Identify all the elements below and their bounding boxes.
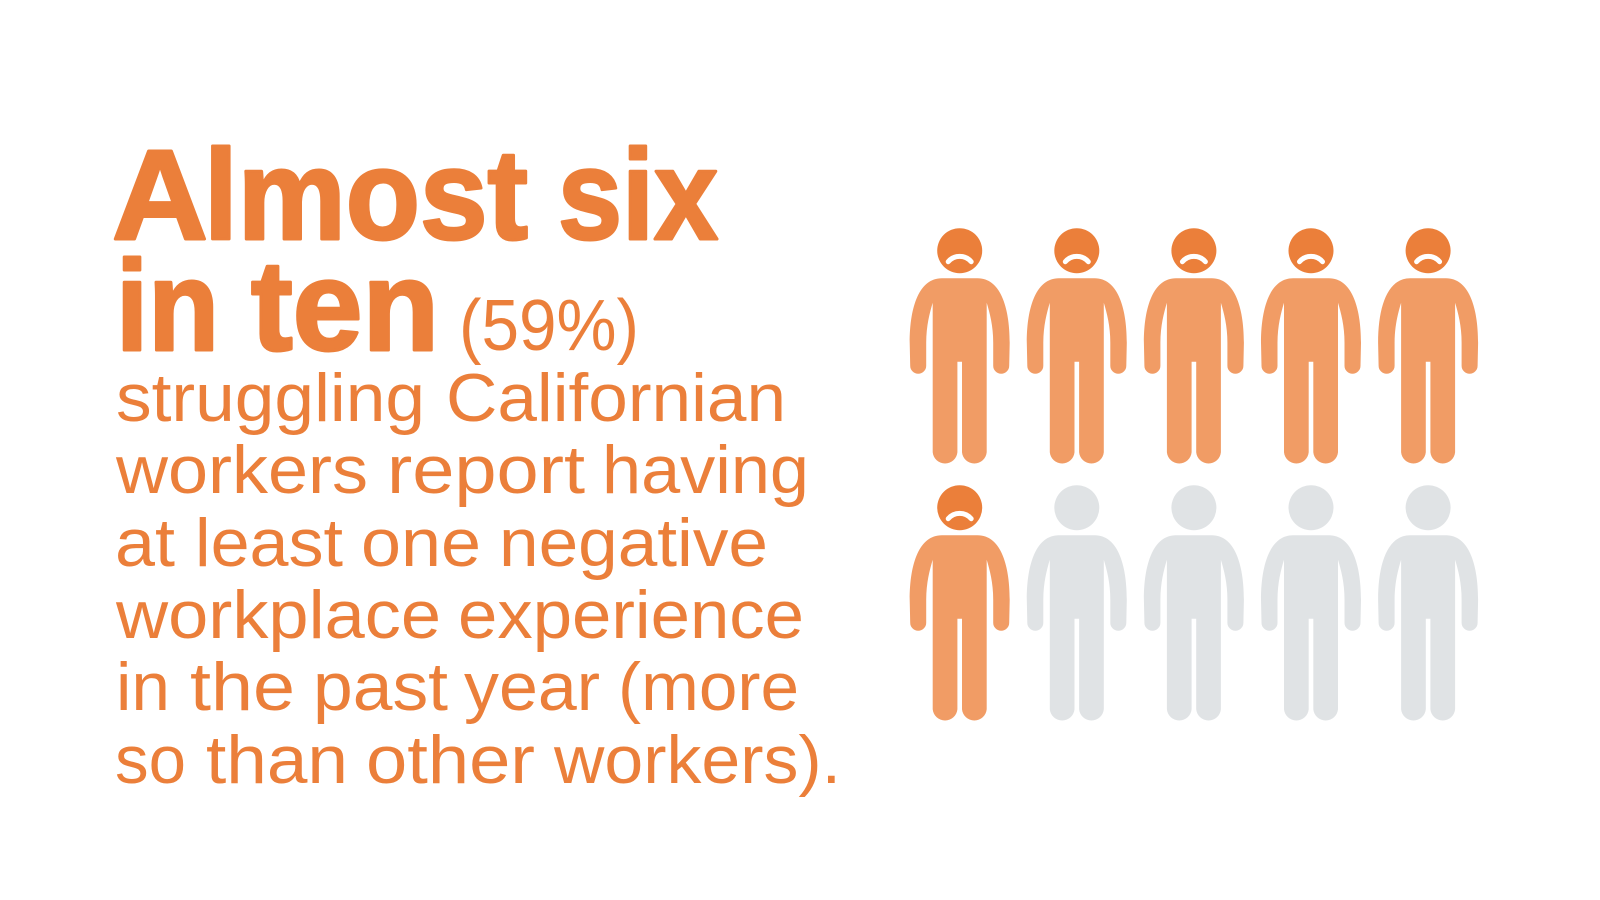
person 8: grey [1144, 485, 1244, 720]
body text: (more [618, 649, 799, 725]
body text: workplace [115, 577, 441, 653]
body text: workers). [553, 722, 841, 798]
body text [115, 360, 841, 798]
body text: year [464, 649, 600, 725]
body text: so [115, 722, 186, 798]
body text: the [190, 649, 295, 725]
body text: struggling [116, 360, 425, 436]
body text: workers [115, 432, 368, 508]
statistic: 59 percent: (59%) [459, 286, 639, 366]
heading: almost six in ten [112, 124, 718, 378]
person 6: sad orange [910, 485, 1010, 720]
body text: negative [499, 505, 768, 581]
person 1: sad orange [910, 228, 1010, 463]
body text: least [195, 505, 343, 581]
body text: Californian [446, 360, 786, 436]
heading: almost six in ten: six [558, 124, 718, 267]
body text: at [115, 505, 175, 581]
body text: report [387, 432, 585, 508]
person 7: grey [1027, 485, 1127, 720]
body text: than [206, 722, 348, 798]
person 5: sad orange [1378, 228, 1478, 463]
body text: experience [458, 577, 804, 653]
heading: almost six in ten: ten [251, 235, 439, 378]
person 3: sad orange [1144, 228, 1244, 463]
heading: almost six in ten: lmost [204, 124, 528, 267]
heading: almost six in ten: in [116, 235, 219, 378]
pictogram: ten people, six highlighted [910, 228, 1478, 720]
body text: having [602, 432, 809, 508]
person 10: grey [1378, 485, 1478, 720]
body text: one [361, 505, 481, 581]
body text: past [313, 649, 448, 725]
person 9: grey [1261, 485, 1361, 720]
heading: almost six in ten: A [112, 124, 208, 267]
person 2: sad orange [1027, 228, 1127, 463]
body text: other [366, 722, 535, 798]
person 4: sad orange [1261, 228, 1361, 463]
body text: in [116, 649, 170, 725]
